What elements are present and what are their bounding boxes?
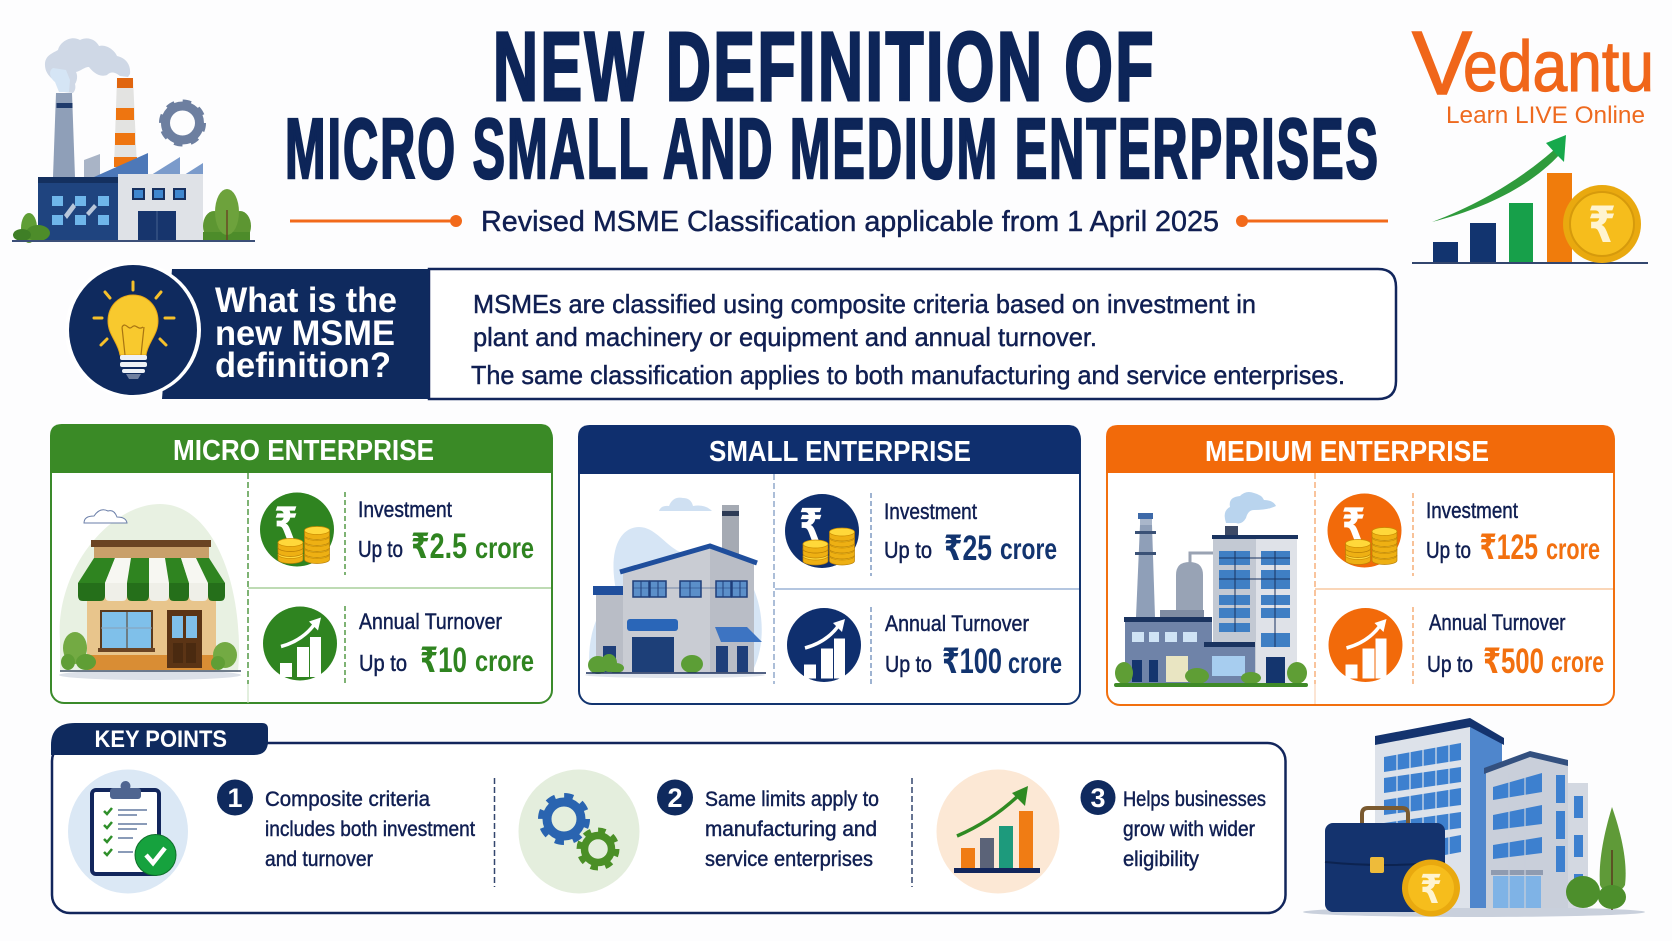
- point 2: manufacturing and: [705, 817, 877, 841]
- point 3: 3: [1090, 783, 1106, 813]
- investment figures: [358, 497, 534, 566]
- icon: office buildings with briefcase and coin: [1303, 718, 1645, 917]
- point 3: grow with wider: [1123, 817, 1255, 841]
- subtitle with orange rules: Revised MSME Classification applicable from 1 April 2025: [481, 206, 1219, 238]
- icon: rupee coins: [785, 494, 859, 568]
- investment figures: crore: [1546, 533, 1600, 566]
- icon: shop illustration: [59, 504, 241, 680]
- definition text: [471, 289, 1345, 390]
- investment figures: crore: [1000, 533, 1057, 566]
- point 3: Helps businesses: [1123, 787, 1266, 811]
- logo: Vedantu: Learn LIVE Online: [1446, 102, 1645, 129]
- investment figures: ₹125: [1480, 528, 1538, 567]
- panel: small enterprise: [578, 425, 1080, 704]
- icon: rupee coins: ₹: [274, 500, 298, 548]
- icon: rupee coins: [260, 492, 334, 566]
- point 1: and turnover: [265, 847, 373, 871]
- investment figures: [884, 499, 1057, 568]
- icon: growth bars: [936, 770, 1060, 894]
- turnover figures: Annual Turnover: [359, 609, 502, 634]
- icon: growth chart with rupee coin: [1412, 135, 1648, 263]
- turnover figures: [359, 609, 534, 680]
- investment figures: [1426, 498, 1600, 567]
- investment figures: crore: [475, 532, 534, 565]
- icon: industrial complex: [1114, 492, 1308, 687]
- point 1: Composite criteria: [265, 787, 430, 811]
- investment figures: Investment: [1426, 498, 1518, 523]
- point 3: [1080, 780, 1266, 871]
- investment figures: Investment: [358, 497, 452, 522]
- icon: factory building: [585, 498, 766, 678]
- turnover figures: Up to: [885, 651, 932, 677]
- definition text: plant and machinery or equipment and annual turnover.: [473, 322, 1097, 352]
- turnover figures: [885, 611, 1062, 681]
- turnover figures: Up to: [1427, 651, 1473, 677]
- turnover figures: [1427, 610, 1604, 681]
- turnover figures: Up to: [359, 650, 407, 676]
- point 2: [657, 780, 879, 871]
- heading: medium: MEDIUM ENTERPRISE: [1205, 436, 1489, 468]
- heading: micro: MICRO ENTERPRISE: [173, 435, 434, 467]
- panel: medium enterprise: [1106, 425, 1614, 705]
- turnover figures: ₹500: [1483, 642, 1544, 681]
- investment figures: Up to: [1426, 537, 1471, 563]
- question heading: What is the: [215, 281, 397, 320]
- investment figures: Up to: [884, 537, 932, 563]
- turnover figures: crore: [1551, 646, 1604, 679]
- definition text: The same classification applies to both manufacturing and service enterprises.: [471, 360, 1345, 390]
- panel: what is the new MSME definition: [65, 262, 1396, 399]
- icon: checklist clipboard: [68, 770, 188, 894]
- icon: gears: [518, 770, 640, 894]
- investment figures: ₹25: [944, 529, 992, 568]
- turnover figures: Annual Turnover: [885, 611, 1029, 636]
- logo: Vedantu: [1412, 14, 1654, 129]
- turnover figures: Annual Turnover: [1429, 610, 1566, 635]
- point 1: [217, 780, 475, 871]
- icon: rupee coins: [1328, 494, 1402, 568]
- turnover figures: ₹100: [942, 642, 1002, 681]
- icon: light bulb: [65, 262, 201, 398]
- panel: micro enterprise: [50, 424, 552, 703]
- point 3: eligibility: [1123, 847, 1199, 871]
- panel: key points: [51, 723, 1286, 913]
- turnover figures: crore: [1008, 647, 1062, 680]
- point 1: includes both investment: [265, 817, 475, 841]
- point 1: 1: [227, 783, 243, 813]
- icon: turnover chart: [263, 606, 337, 680]
- subtitle with orange rules: [290, 206, 1388, 238]
- tab: key points: [51, 723, 268, 755]
- icon: growth chart with rupee coin: ₹: [1588, 197, 1616, 253]
- tab: key points: KEY POINTS: [94, 726, 227, 753]
- icon: turnover chart: [1328, 608, 1402, 682]
- investment figures: ₹2.5: [411, 527, 467, 566]
- point 2: Same limits apply to: [705, 787, 879, 811]
- point 2: service enterprises: [705, 847, 873, 871]
- question heading: new MSME: [215, 314, 395, 353]
- title: NEW DEFINITION OF: [493, 12, 1156, 121]
- question heading: [215, 281, 397, 385]
- question heading: definition?: [215, 346, 391, 385]
- icon: rupee coins: ₹: [1342, 500, 1366, 550]
- icon: rupee coins: ₹: [799, 501, 823, 550]
- icon: office buildings with briefcase and coin: ₹: [1420, 868, 1442, 912]
- heading: small: SMALL ENTERPRISE: [709, 436, 971, 468]
- definition text: MSMEs are classified using composite criteria based on investment in: [473, 289, 1256, 319]
- logo: Vedantu: V: [1412, 14, 1472, 114]
- point 2: 2: [667, 783, 683, 813]
- icon: turnover chart: [787, 608, 861, 682]
- investment figures: Up to: [358, 536, 403, 562]
- turnover figures: ₹10: [420, 641, 467, 680]
- title: [285, 12, 1380, 197]
- turnover figures: crore: [475, 645, 534, 678]
- icon: factory illustration: [12, 38, 255, 243]
- investment figures: Investment: [884, 499, 977, 524]
